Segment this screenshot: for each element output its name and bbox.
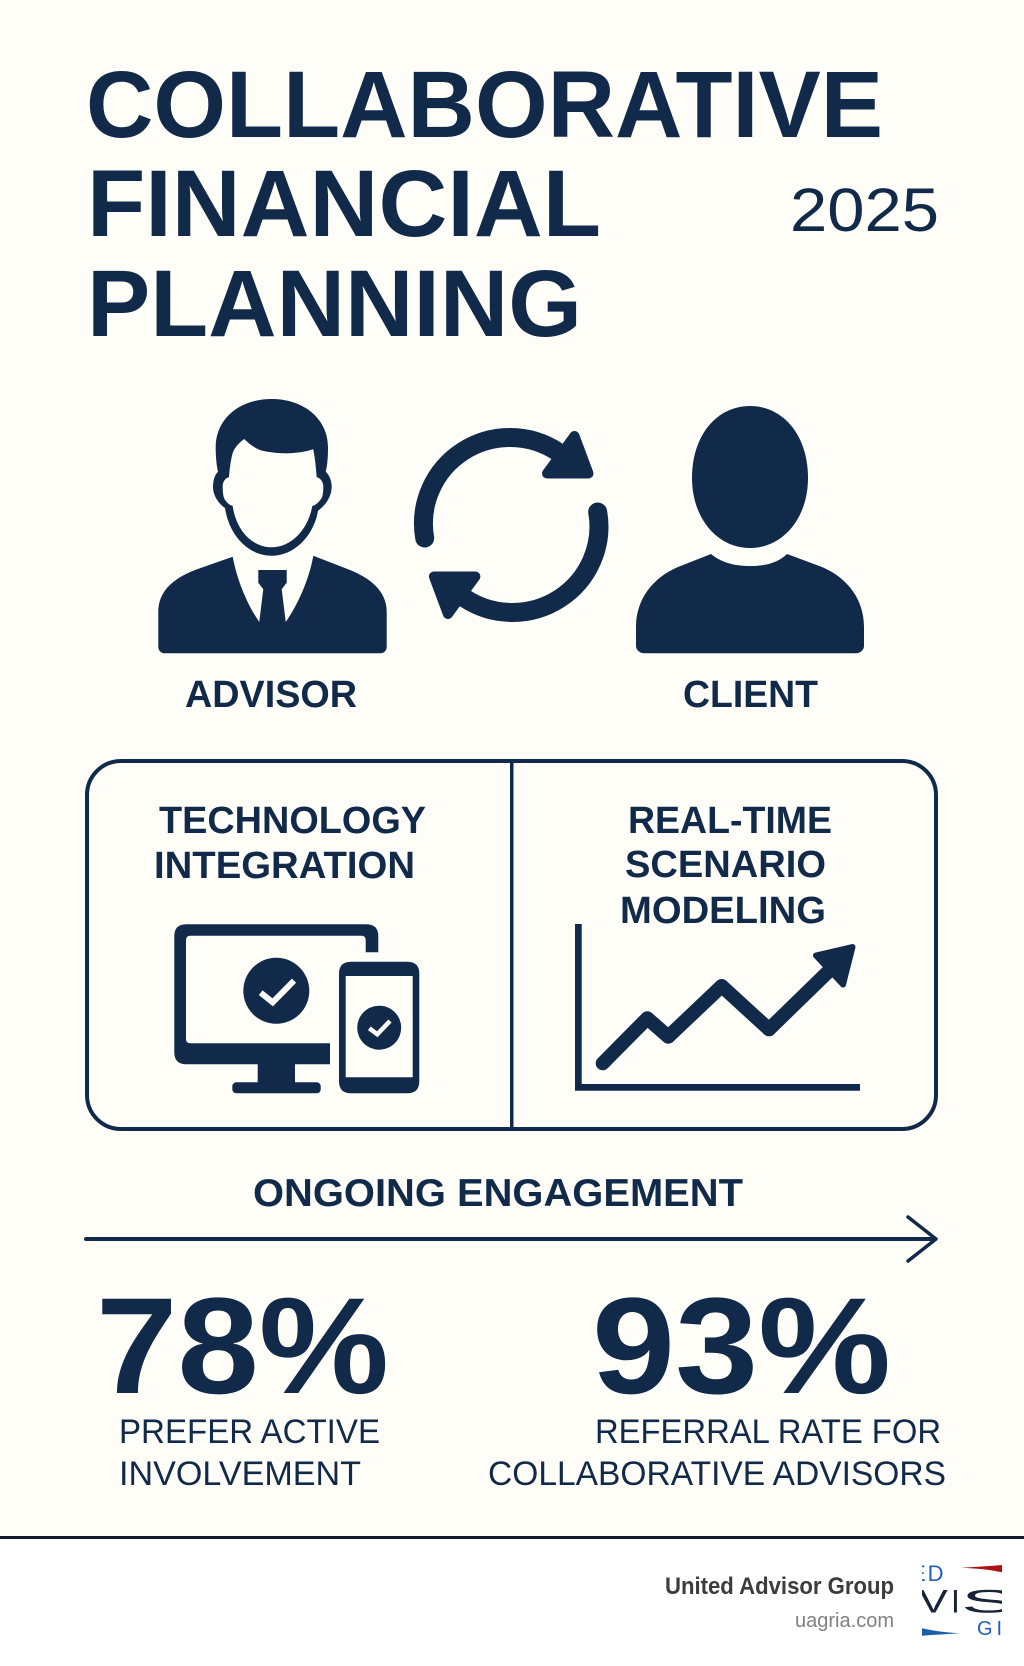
footer: logo: ED: [911, 1561, 946, 1586]
icon: monitor and phone with checkmarks: [174, 924, 419, 1093]
footer: logo: [911, 1561, 1016, 1640]
stat caption: referral rate for collaborative advisors: [488, 1413, 946, 1493]
heading: technology integration: [154, 800, 426, 887]
stat caption: prefer active involvement: INVOLVEMENT: [119, 1455, 361, 1493]
footer: logo: I: [951, 1584, 960, 1620]
panel: technology and scenario modeling: [87, 761, 936, 1129]
chart: rising line: [575, 924, 860, 1091]
stat caption: prefer active involvement: [119, 1413, 380, 1493]
heading: ongoing engagement: ONGOING ENGAGEMENT: [253, 1172, 743, 1215]
footer: publisher name: United Advisor Group: [665, 1573, 894, 1600]
footer: logo: S: [961, 1584, 1016, 1620]
heading: real-time scenario modeling: REAL-TIME: [628, 800, 832, 842]
client label: CLIENT: [683, 674, 818, 716]
footer: logo: V: [919, 1585, 949, 1620]
stat caption: prefer active involvement: PREFER ACTIVE: [119, 1413, 380, 1451]
stat: 78 percent: [96, 1270, 389, 1493]
heading: real-time scenario modeling: [620, 800, 832, 932]
stat caption: referral rate for collaborative advisors: REFERRAL RATE FOR: [595, 1413, 941, 1451]
footer: logo: GI: [977, 1618, 1006, 1640]
heading: real-time scenario modeling: SCENARIO: [625, 844, 826, 886]
title: [86, 52, 883, 357]
title: PLANNING: [87, 251, 582, 357]
icon: client: [636, 406, 864, 653]
arrow: ongoing engagement timeline: [86, 1217, 936, 1261]
title: FINANCIAL: [87, 151, 601, 257]
stat: 93 percent: [488, 1270, 946, 1493]
heading: real-time scenario modeling: MODELING: [620, 890, 826, 932]
icon: two-way cycle arrows: [423, 436, 599, 614]
heading: technology integration: TECHNOLOGY: [159, 800, 426, 842]
heading: technology integration: INTEGRATION: [154, 845, 415, 887]
stat: 93 percent: 93%: [592, 1270, 891, 1423]
stat caption: referral rate for collaborative advisors: COLLABORATIVE ADVISORS: [488, 1455, 946, 1493]
footer: website: uagria.com: [795, 1610, 894, 1632]
title: COLLABORATIVE: [86, 52, 883, 158]
icon: advisor: [158, 399, 387, 653]
year: 2025: [790, 176, 939, 244]
advisor label: ADVISOR: [185, 674, 357, 716]
footer rule: [0, 1536, 1024, 1539]
stat: 78 percent: 78%: [96, 1270, 389, 1423]
